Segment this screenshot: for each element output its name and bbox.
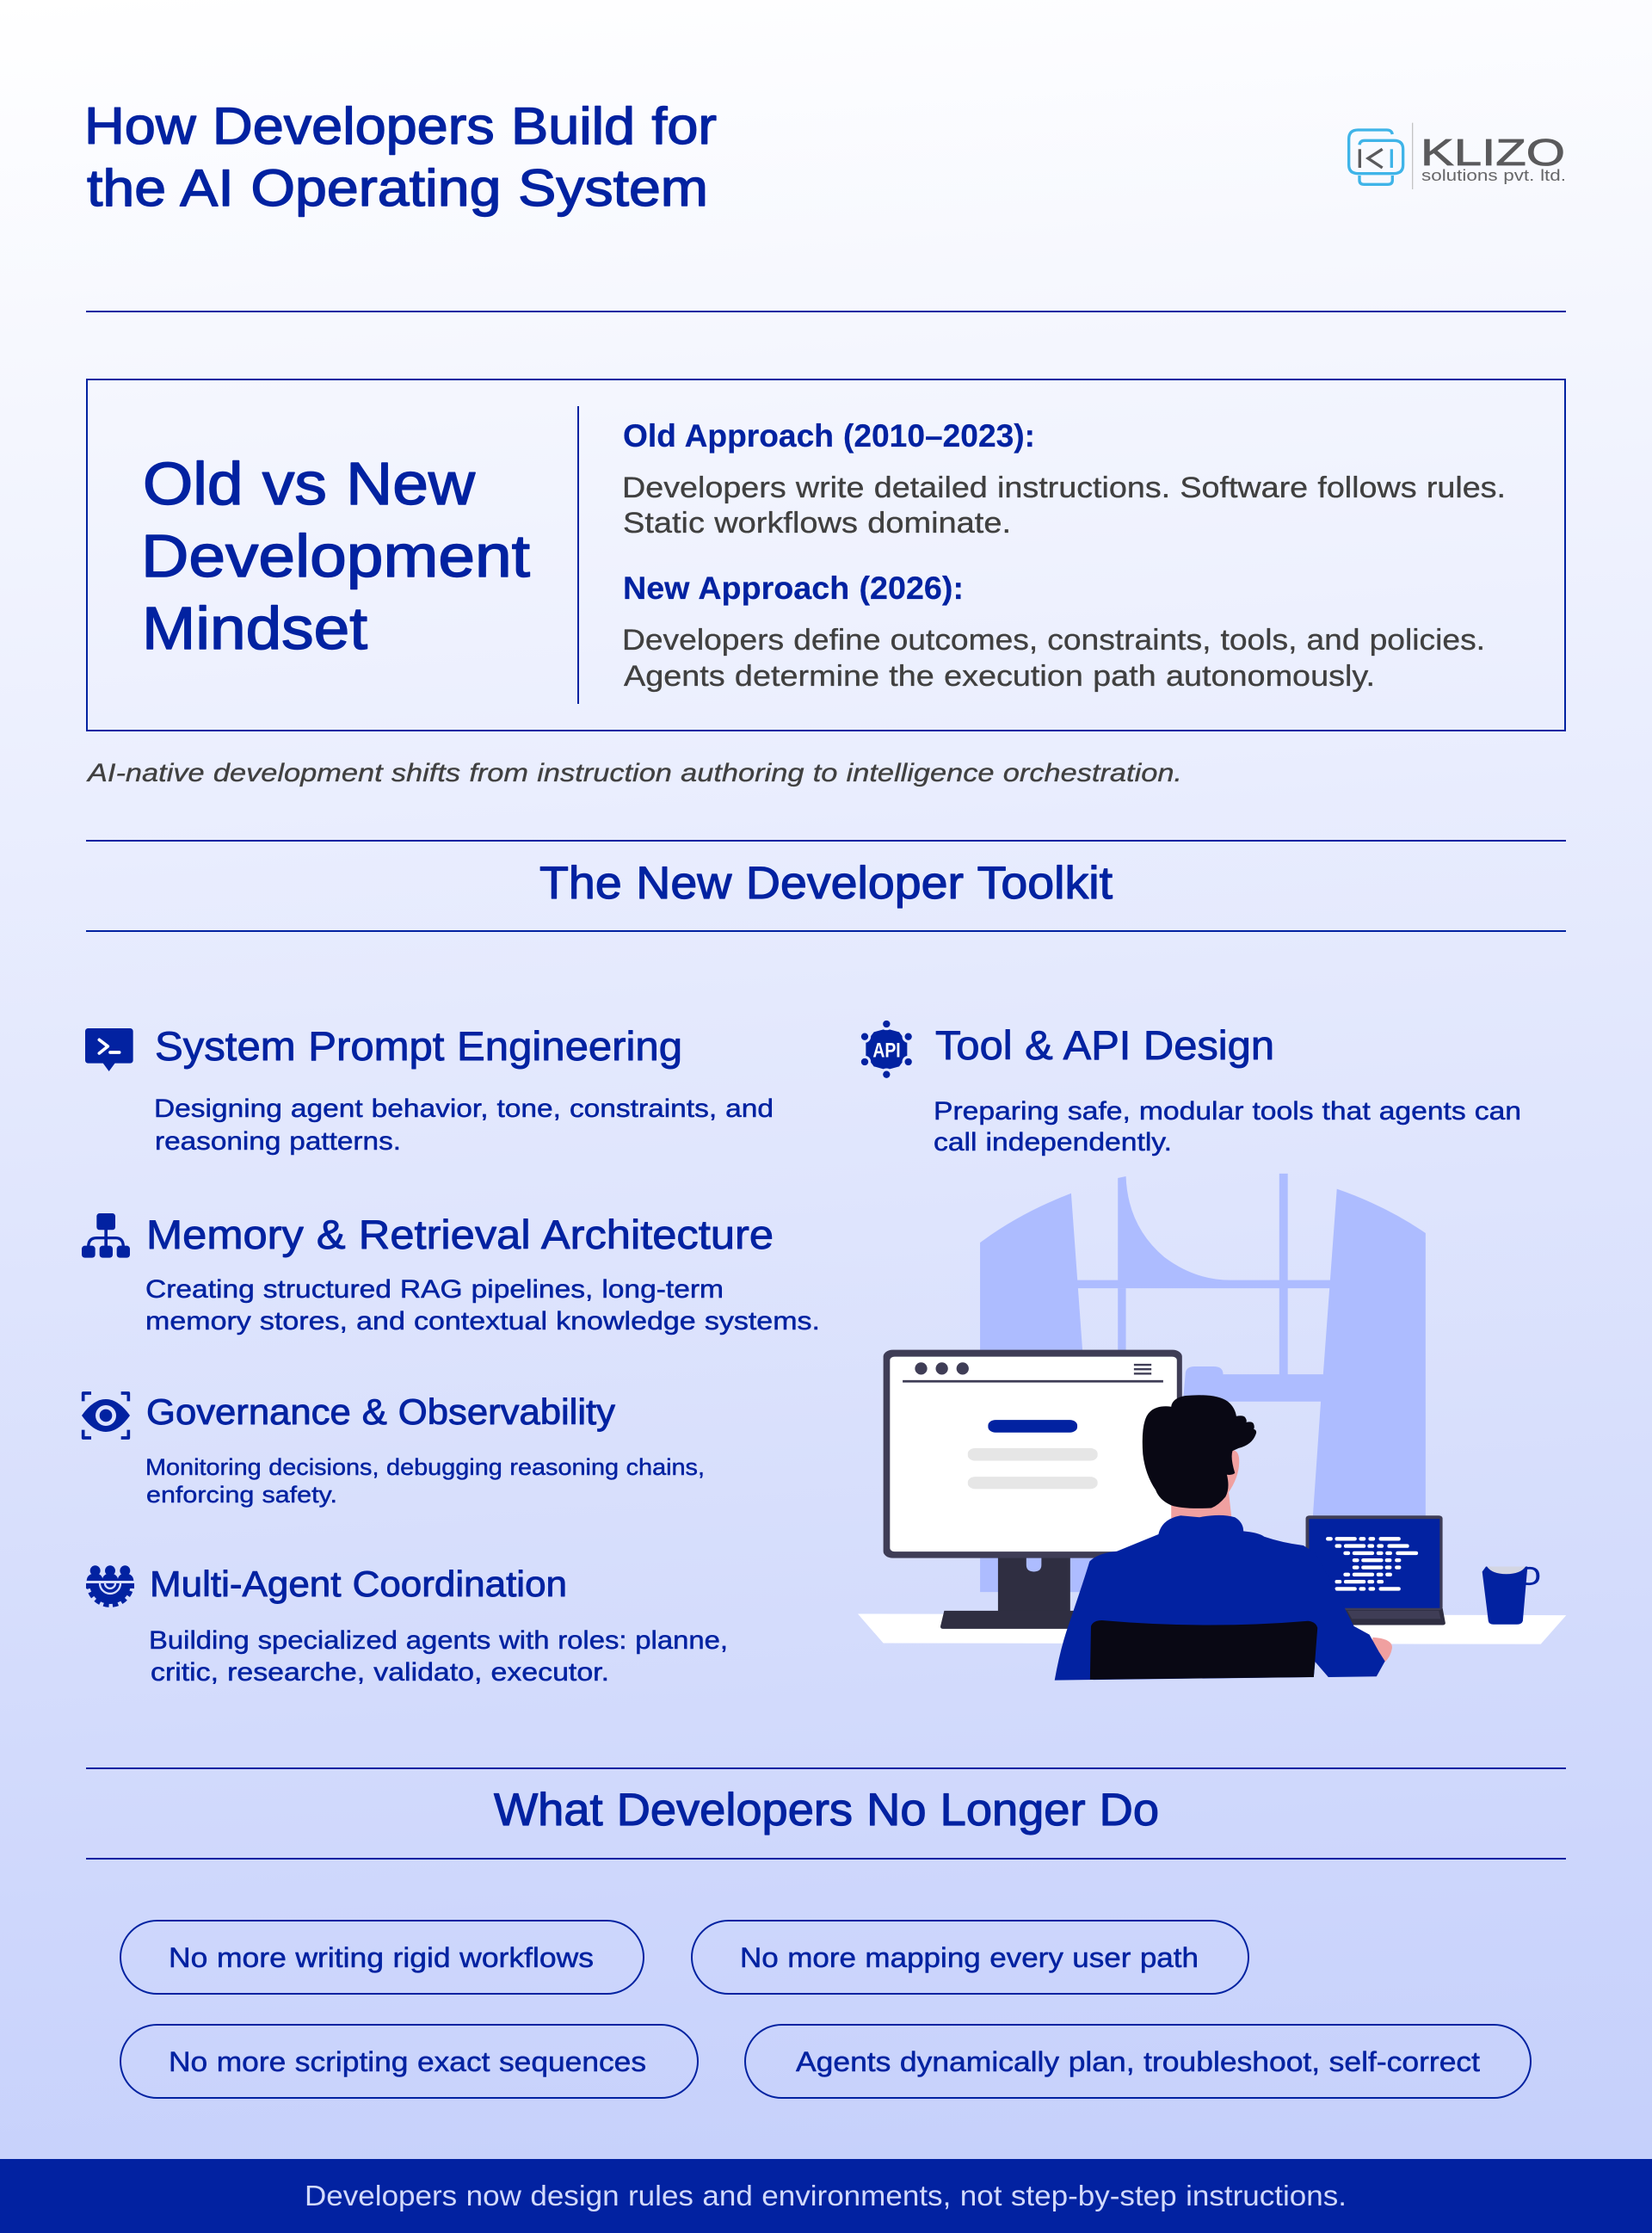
logo: Klizo: KLIZO [1421,132,1565,174]
heading: old vs new development mindset: Mindset [142,595,367,662]
pill: no more writing rigid workflows [120,1921,644,1994]
item: governance and observability: enforcing safety. [146,1482,337,1508]
text: new approach: Developers define outcomes, constraints, tools, and policies. [622,624,1485,657]
icon: api hub: API [872,1039,901,1062]
footer band: Developers now design rules and environments, not step-by-step instructions. [305,2180,1347,2211]
pill: no more scripting exact sequences [120,2025,698,2098]
pill: no more mapping every user path: No more mapping every user path [740,1942,1199,1973]
monitor [884,1350,1182,1629]
section heading: the new developer toolkit: The New Developer Toolkit [539,858,1113,909]
item: governance and observability [82,1391,705,1508]
text: new approach: New Approach (2026): [623,571,964,606]
item: multi-agent coordination [86,1564,728,1687]
text: old approach [622,418,1506,540]
item: system prompt engineering: Designing agent behavior, tone, constraints, and [154,1095,774,1123]
item: governance and observability: Monitoring decisions, debugging reasoning chains, [145,1454,705,1480]
item: multi-agent coordination: Multi-Agent Coordination [150,1564,567,1604]
desk [858,1613,1566,1644]
heading: old vs new development mindset: Development [141,522,530,589]
title [84,97,717,217]
icon: eye in focus frame [82,1393,130,1438]
person [1055,1395,1392,1681]
logo: Klizo: solutions pvt. ltd. [1421,167,1566,184]
mug [1482,1567,1538,1625]
item: memory and retrieval architecture: Memory & Retrieval Architecture [146,1212,774,1257]
item: governance and observability: Governance & Observability [146,1391,615,1432]
illustration: developer at desk [858,1174,1566,1681]
heading: old vs new development mindset: Old vs New [143,450,475,517]
title: the AI Operating System [87,159,708,217]
text: new approach: Agents determine the execution path autonomously. [624,660,1375,693]
window and curtains [980,1174,1426,1592]
item: system prompt engineering: reasoning patterns. [155,1127,401,1156]
item: memory and retrieval architecture: Creating structured RAG pipelines, long-term [145,1275,724,1304]
item: memory and retrieval architecture [82,1212,820,1335]
text: old approach: Old Approach (2010–2023): [623,418,1035,453]
item: tool and api design [860,1019,1521,1157]
text: new approach [622,571,1485,693]
logo: Klizo [1349,123,1566,189]
text: old approach: Static workflows dominate. [623,507,1011,540]
heading: old vs new development mindset [141,450,530,662]
item: tool and api design: call independently. [934,1128,1172,1157]
footer band [0,2159,1652,2233]
item: system prompt engineering [85,1023,774,1156]
item: tool and api design: Preparing safe, modular tools that agents can [934,1097,1521,1126]
pill: agents dynamically plan: Agents dynamically plan, troubleshoot, self-correct [796,2046,1480,2077]
icon: hierarchy [82,1213,130,1258]
pill: no more mapping every user path [692,1921,1248,1994]
section heading: what developers no longer do: What Developers No Longer Do [494,1785,1159,1835]
pill: no more scripting exact sequences: No more scripting exact sequences [169,2046,646,2077]
panel: old vs new mindset [87,379,1565,731]
pill: agents dynamically plan [745,2025,1531,2098]
laptop [1306,1515,1446,1625]
title: How Developers Build for [84,97,717,155]
italic takeaway: AI-native development shifts from instruction authoring to intelligence orchestration. [86,759,1182,787]
pill: no more writing rigid workflows: No more writing rigid workflows [169,1942,594,1973]
item: system prompt engineering: System Prompt Engineering [155,1023,682,1069]
item: multi-agent coordination: critic, researche, validato, executor. [151,1658,609,1687]
icon: terminal chat bubble [85,1028,133,1071]
item: multi-agent coordination: Building specialized agents with roles: planne, [149,1626,728,1655]
item: tool and api design: Tool & API Design [935,1022,1274,1068]
item: memory and retrieval architecture: memory stores, and contextual knowledge systems. [145,1307,820,1335]
icon: team and gear [86,1565,134,1605]
text: old approach: Developers write detailed instructions. Software follows rules. [622,472,1506,504]
icon: api hub [860,1019,913,1079]
